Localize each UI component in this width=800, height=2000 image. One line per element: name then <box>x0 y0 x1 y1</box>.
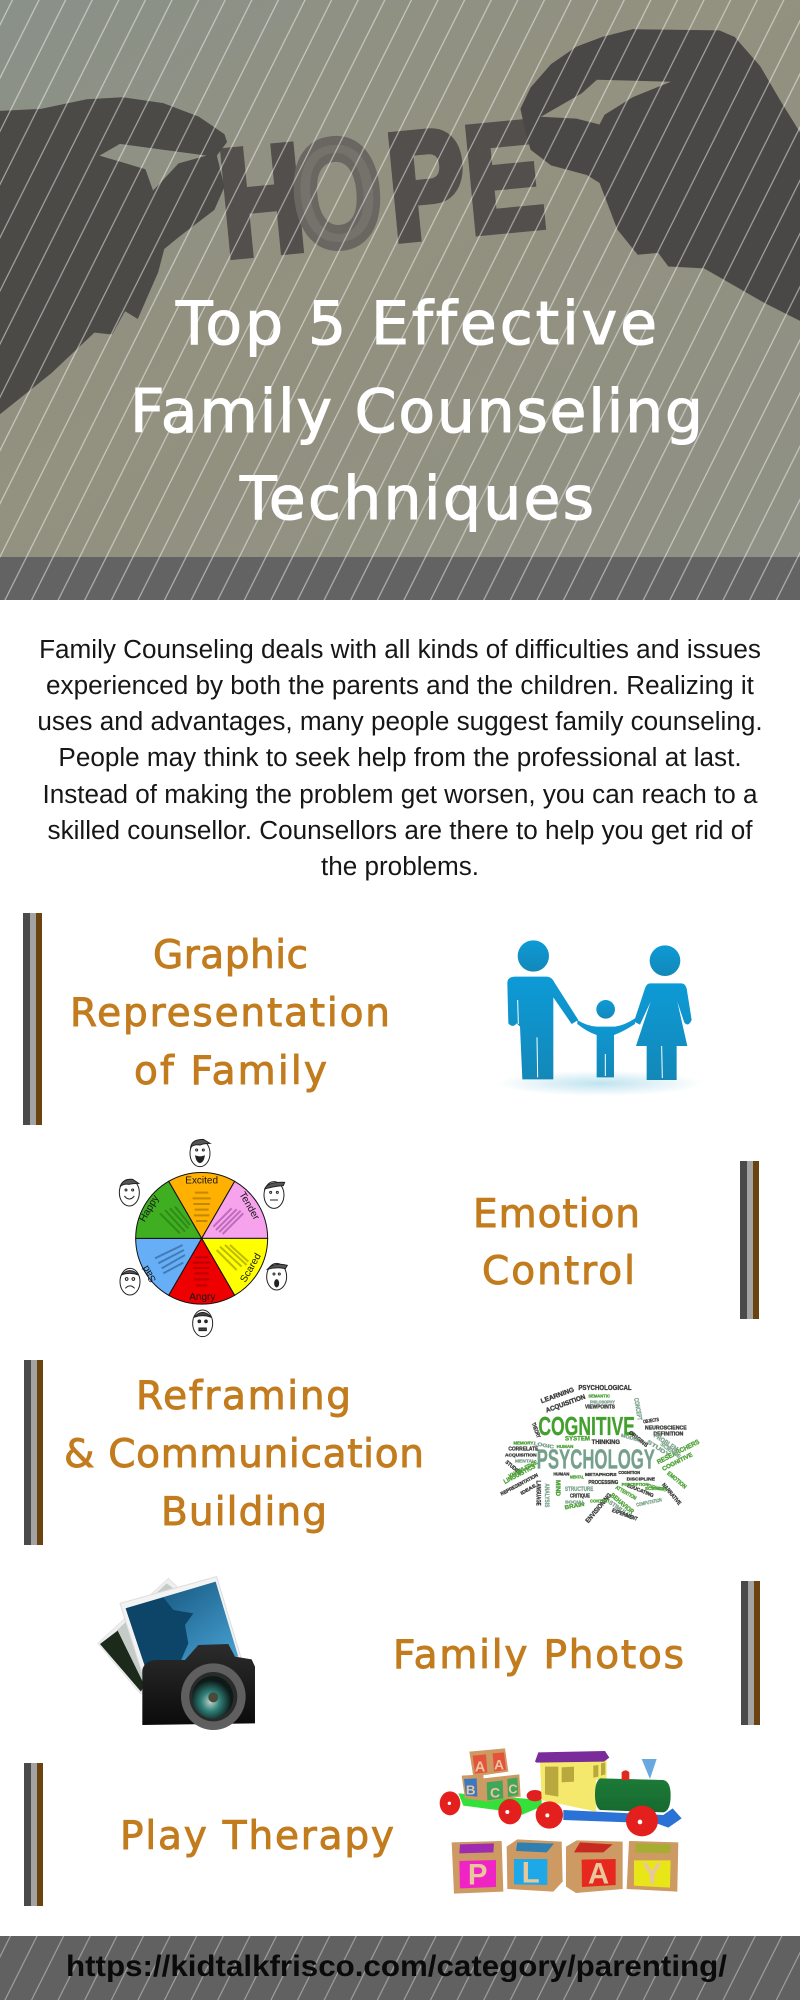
icon: family figures <box>497 940 703 1096</box>
silhouette: right hand <box>520 29 800 321</box>
heading: Graphic Representation of Family <box>70 933 390 1094</box>
icon: cognitive psychology word cloud: ENVISIONING <box>584 1492 613 1525</box>
icon: emotion wheel with faces: Sad <box>141 1263 159 1284</box>
title <box>130 289 703 534</box>
icon: cognitive psychology word cloud: VIEWPOINTS <box>585 1405 615 1411</box>
heading: Graphic Representation of Family: of Family <box>134 1049 327 1094</box>
icon: cognitive psychology word cloud: LEARNING <box>540 1387 575 1405</box>
footer band with url <box>0 1936 800 2000</box>
icon: cognitive psychology word cloud: STUDIES <box>504 1460 523 1477</box>
icon: cognitive psychology word cloud: PERCEPTION <box>622 1482 649 1487</box>
back photo <box>98 1578 177 1695</box>
front photo <box>120 1577 242 1672</box>
icon: cognitive psychology word cloud: LOGIC <box>533 1441 555 1451</box>
icon: cognitive psychology word cloud: STUDY <box>646 1439 671 1459</box>
icon: cognitive psychology word cloud: LANGUAGE <box>535 1481 542 1506</box>
icon: cognitive psychology word cloud: THEORY <box>530 1422 541 1439</box>
icon: cognitive psychology word cloud: SYSTEM <box>565 1437 590 1443</box>
icon: cognitive psychology word cloud: BRAIN <box>564 1502 585 1511</box>
icon: cognitive psychology word cloud: HUMAN <box>553 1471 569 1476</box>
icon: cognitive psychology word cloud: NEUROSCIENCE <box>645 1425 687 1431</box>
icon: emotion wheel with faces: Scared <box>238 1252 264 1285</box>
section bar 5 <box>24 1763 43 1906</box>
icon: cognitive psychology word cloud: PSYCHOLOGY <box>537 1443 655 1474</box>
icon: emotion wheel with faces: Happy <box>138 1193 161 1224</box>
heading: Reframing & Communication Building: Reframing <box>136 1374 351 1419</box>
section bar 2 <box>740 1161 759 1319</box>
section bar 1 <box>23 913 42 1125</box>
icon: cognitive psychology word cloud: METAPHORS <box>585 1472 617 1477</box>
icon: cognitive psychology word cloud: MIND <box>554 1480 561 1496</box>
icon: emotion wheel with faces: Tender <box>236 1190 262 1223</box>
wheel sectors <box>136 1172 268 1304</box>
icon: cognitive psychology word cloud: NARRATIVE <box>660 1482 682 1507</box>
icon: toy train and play blocks <box>440 1748 682 1894</box>
ABC blocks on the train: B <box>466 1782 476 1797</box>
silhouette: left hand <box>0 97 227 414</box>
panel: hero header <box>0 0 800 600</box>
icon: cognitive psychology word cloud: COGNITION <box>618 1470 640 1475</box>
icon: cognitive psychology word cloud: RESEARCHERS <box>656 1438 701 1466</box>
intro paragraph: the problems. <box>321 851 479 881</box>
ABC blocks on the train: C <box>490 1785 500 1801</box>
icon: cognitive psychology word cloud: BEHAVIOR <box>609 1492 635 1516</box>
icon: cognitive psychology word cloud: ATTENTION <box>614 1485 637 1502</box>
icon: cognitive psychology word cloud: MENTAL <box>515 1459 535 1464</box>
icon: cognitive psychology word cloud: PROBLEM <box>652 1432 679 1453</box>
camera body <box>142 1644 255 1725</box>
icon: cognitive psychology word cloud: IDEAS <box>520 1483 537 1496</box>
icon: cognitive psychology word cloud: ANALYSIS <box>543 1483 550 1508</box>
heading: Play Therapy: Play Therapy <box>120 1814 394 1859</box>
icon: cognitive psychology word cloud: THOUGHT <box>646 1483 667 1493</box>
PLAY blocks: L <box>522 1856 540 1889</box>
icon: cognitive psychology word cloud: SCIENCE <box>645 1486 665 1491</box>
icon: cognitive psychology word cloud: STRUCTURE <box>565 1487 593 1493</box>
intro paragraph <box>37 634 763 881</box>
icon: cognitive psychology word cloud: MEMORY <box>513 1440 533 1445</box>
icon: cognitive psychology word cloud: EMOTION <box>665 1471 687 1491</box>
icon: cognitive psychology word cloud: EXPERIMENT <box>611 1508 639 1523</box>
lens <box>181 1663 246 1730</box>
icon: cognitive psychology word cloud: CRITIQUE <box>570 1493 590 1499</box>
icon: cognitive psychology word cloud: PSYCHOLOGICAL <box>578 1383 632 1392</box>
icon: cognitive psychology word cloud: EDUCATING <box>626 1483 655 1499</box>
icon: cognitive psychology word cloud: PHILOSOPHY <box>590 1399 615 1404</box>
icon: cognitive psychology word cloud: CORRELATE <box>508 1446 539 1452</box>
heading: Reframing & Communication Building: & Communication <box>64 1432 424 1477</box>
icon: cognitive psychology word cloud: OBJECTS <box>643 1417 660 1425</box>
ABC blocks on the train: A <box>494 1757 504 1773</box>
PLAY blocks: A <box>588 1858 609 1891</box>
faces around wheel <box>119 1139 287 1337</box>
ABC blocks on the train: C <box>508 1783 518 1797</box>
icon: cognitive psychology word cloud: ACQUISITION <box>545 1394 587 1415</box>
icon: cognitive psychology word cloud: COMPUTATION <box>636 1497 663 1509</box>
intro paragraph: People may think to seek help from the professional at last. <box>58 742 742 772</box>
heading: Graphic Representation of Family: Representation <box>70 991 390 1036</box>
icon: cognitive psychology word cloud: PROCESSING <box>588 1480 618 1486</box>
icon: emotion wheel with faces <box>119 1139 287 1337</box>
icon: cognitive psychology word cloud: MENTAL <box>570 1474 584 1480</box>
intro paragraph: uses and advantages, many people suggest family counseling. <box>37 706 763 736</box>
icon: camera with photos <box>98 1577 255 1730</box>
url text: https://kidtalkfrisco.com/category/parenting/ <box>66 1950 728 1983</box>
icon: cognitive psychology word cloud: THINKING <box>592 1440 620 1446</box>
PLAY blocks <box>452 1839 678 1894</box>
icon: cognitive psychology word cloud: LINGUISTICS <box>503 1463 537 1486</box>
icon: cognitive psychology word cloud: CONCEPT <box>632 1397 643 1421</box>
icon: cognitive psychology word cloud: ACQUISITION <box>505 1452 537 1457</box>
HOPE cut-out word: HOPE <box>213 91 550 289</box>
intro paragraph: Family Counseling deals with all kinds of difficulties and issues <box>39 634 761 664</box>
icon: cognitive psychology word cloud: COGNITIVE <box>538 1411 635 1441</box>
heading: Reframing & Communication Building <box>64 1374 424 1535</box>
icon: cognitive psychology word cloud: DEFINITION <box>653 1431 683 1437</box>
icon: cognitive psychology word cloud: STIMULUS <box>607 1500 634 1521</box>
icon: cognitive psychology word cloud <box>500 1383 701 1525</box>
intro paragraph: Instead of making the problem get worsen, you can reach to a <box>42 779 758 809</box>
heading: Emotion Control: Emotion <box>473 1192 640 1237</box>
icon: cognitive psychology word cloud: CONTEXT <box>590 1499 610 1505</box>
title: Family Counseling <box>130 377 703 447</box>
heading: Reframing & Communication Building: Building <box>161 1490 327 1535</box>
ABC blocks on the train: A <box>475 1760 486 1776</box>
heading: Emotion Control: Control <box>482 1249 635 1294</box>
icon: cognitive psychology word cloud: SEMANTIC <box>588 1393 611 1398</box>
icon: cognitive psychology word cloud: COGNITIVE <box>662 1452 694 1473</box>
icon: cognitive psychology word cloud: DISCIPLINE <box>627 1476 656 1482</box>
ABC blocks on the train <box>462 1748 521 1802</box>
section bar 4 <box>741 1581 760 1725</box>
icon: cognitive psychology word cloud: ORIGINS <box>627 1430 649 1449</box>
icon: emotion wheel with faces: Excited <box>185 1176 218 1187</box>
icon: cognitive psychology word cloud: KNOWLEDGE <box>508 1460 539 1480</box>
heading: Family Photos: Family Photos <box>393 1633 684 1678</box>
title: Top 5 Effective <box>175 289 657 359</box>
intro paragraph: experienced by both the parents and the children. Realizing it <box>46 670 755 700</box>
intro paragraph: skilled counsellor. Counsellors are there to help you get rid of <box>48 815 753 845</box>
icon: cognitive psychology word cloud: SOCIAL <box>565 1499 585 1504</box>
icon: emotion wheel with faces: Angry <box>189 1292 215 1303</box>
title: Techniques <box>239 464 594 534</box>
bottom band of hero <box>0 557 800 600</box>
icon: cognitive psychology word cloud: SCIENCE <box>659 1442 682 1460</box>
icon: cognitive psychology word cloud: MODEL <box>620 1433 641 1443</box>
icon: cognitive psychology word cloud: HUMAN <box>557 1444 574 1449</box>
icon: cognitive psychology word cloud: REPRESENTATION <box>500 1472 540 1497</box>
heading: Emotion Control <box>473 1192 640 1294</box>
PLAY blocks: Y <box>642 1858 662 1891</box>
section bar 3 <box>24 1360 43 1545</box>
toy train <box>440 1751 682 1836</box>
heading: Graphic Representation of Family: Graphic <box>153 933 308 978</box>
PLAY blocks: P <box>468 1859 487 1892</box>
